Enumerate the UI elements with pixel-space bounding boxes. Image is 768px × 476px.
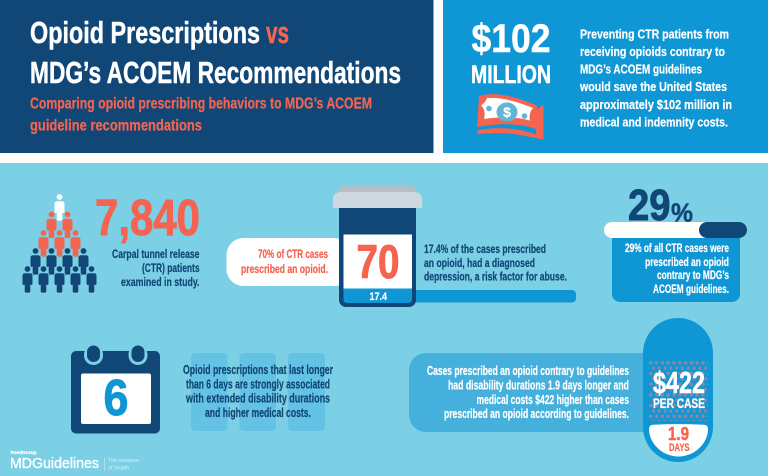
logo: MDGuidelines: of health xyxy=(108,466,129,472)
text: duration finding: than 6 days are strongly associated xyxy=(186,378,330,392)
icon: capsule with cost and days xyxy=(643,318,713,462)
stat: 29%: % xyxy=(671,198,693,228)
logo: MDGuidelines: The measure xyxy=(108,458,139,464)
text: 29 percent caption: ACOEM guidelines. xyxy=(653,282,729,296)
callout: 70 percent pill xyxy=(226,238,352,286)
callout: disability and cost finding: had disability durations 1.9 days longer and xyxy=(448,378,629,392)
text: depression finding: depression, a risk factor for abuse. xyxy=(424,270,567,284)
icon: calendar with 6: 6 xyxy=(104,369,128,426)
subtitle xyxy=(30,96,372,134)
callout: disability and cost finding: medical costs $422 higher than cases xyxy=(476,393,629,407)
panel: savings xyxy=(443,0,768,153)
text: duration finding: with extended disability durations xyxy=(185,392,330,406)
icon: pill bottle xyxy=(333,186,422,307)
icon: capsule with cost and days: PER CASE xyxy=(653,395,705,411)
icon: pill bottle: 70 xyxy=(356,235,400,288)
icon: capsule with cost and days: DAYS xyxy=(669,442,690,454)
decoration: translucent pill bars xyxy=(191,353,325,431)
text: savings description: medical and indemnity costs. xyxy=(580,114,728,130)
panel: light blue body xyxy=(0,163,768,476)
icon: capsule with cost and days: $422 xyxy=(653,365,705,400)
text: patients caption: examined in study. xyxy=(121,275,200,289)
text: savings description: approximately $102 million in xyxy=(580,97,732,112)
stat: $102 million xyxy=(471,17,551,89)
text: patients caption: (CTR) patients xyxy=(142,261,200,275)
text: depression finding: an opioid, had a diagnosed xyxy=(424,256,535,270)
text: 29 percent caption: contrary to MDG’s xyxy=(657,268,729,282)
text: depression finding: 17.4% of the cases prescribed xyxy=(424,242,546,256)
stat: $102 million: MILLION xyxy=(471,61,551,89)
text: savings description: receiving opioids contrary to xyxy=(580,44,725,59)
text: duration finding: Opioid prescriptions that last longer xyxy=(183,363,333,377)
text: patients caption: Carpal tunnel release xyxy=(112,247,200,261)
stat: 7,840 patients: 7,840 xyxy=(95,189,200,246)
icon: calendar with 6 xyxy=(71,345,160,434)
text: 29 percent caption: prescribed an opioid xyxy=(645,255,729,269)
icon: dollar bill xyxy=(477,94,544,140)
callout: disability and cost finding: prescribed an opioid according to guidelines. xyxy=(444,407,629,421)
icon: people pyramid xyxy=(22,194,96,293)
text: savings description: MDG’s ACOEM guidelines xyxy=(580,62,702,76)
stat: 7,840 patients xyxy=(95,189,200,289)
icon: capsule with cost and days: 1.9 xyxy=(668,424,689,444)
text: duration finding: and higher medical costs. xyxy=(205,406,311,420)
callout: disability and cost finding xyxy=(409,353,659,432)
text: patients caption xyxy=(112,247,200,289)
panel: 29 percent xyxy=(604,181,747,302)
logo: MDGuidelines xyxy=(10,450,139,472)
text: savings description xyxy=(579,26,732,130)
heading: main title: vs xyxy=(266,16,289,50)
subtitle: guideline recommendations xyxy=(30,118,202,134)
subtitle: Comparing opioid prescribing behaviors to MDG’s ACOEM xyxy=(30,96,372,112)
icon: pill bottle: 17.4 xyxy=(370,291,388,303)
bar: 29 percent progress xyxy=(604,222,747,238)
heading: main title: MDG’s ACOEM Recommendations xyxy=(30,56,401,90)
callout: 70 percent pill: 70% of CTR cases xyxy=(258,247,328,261)
icon: dollar bill: $ xyxy=(503,104,511,120)
text: 29 percent caption xyxy=(625,241,729,296)
panel: title header xyxy=(0,0,434,153)
callout: disability and cost finding: Cases prescribed an opioid contrary to guidelines xyxy=(427,364,629,378)
logo: MDGuidelines: ReedGroup xyxy=(10,450,37,455)
bar: 17.4 percent xyxy=(400,290,576,302)
text: savings description: Preventing CTR patients from xyxy=(580,26,729,42)
callout: 70 percent pill: prescribed an opioid. xyxy=(241,262,328,276)
heading: main title: Opioid Prescriptions xyxy=(30,16,260,50)
stat: 29%: 29 xyxy=(628,181,670,230)
text: duration finding xyxy=(183,363,333,420)
text: savings description: would save the United States xyxy=(579,79,727,94)
heading: main title xyxy=(30,16,401,90)
text: depression finding xyxy=(424,242,567,284)
logo: MDGuidelines: MDGuidelines xyxy=(10,456,99,472)
stat: $102 million: $102 xyxy=(472,17,550,61)
